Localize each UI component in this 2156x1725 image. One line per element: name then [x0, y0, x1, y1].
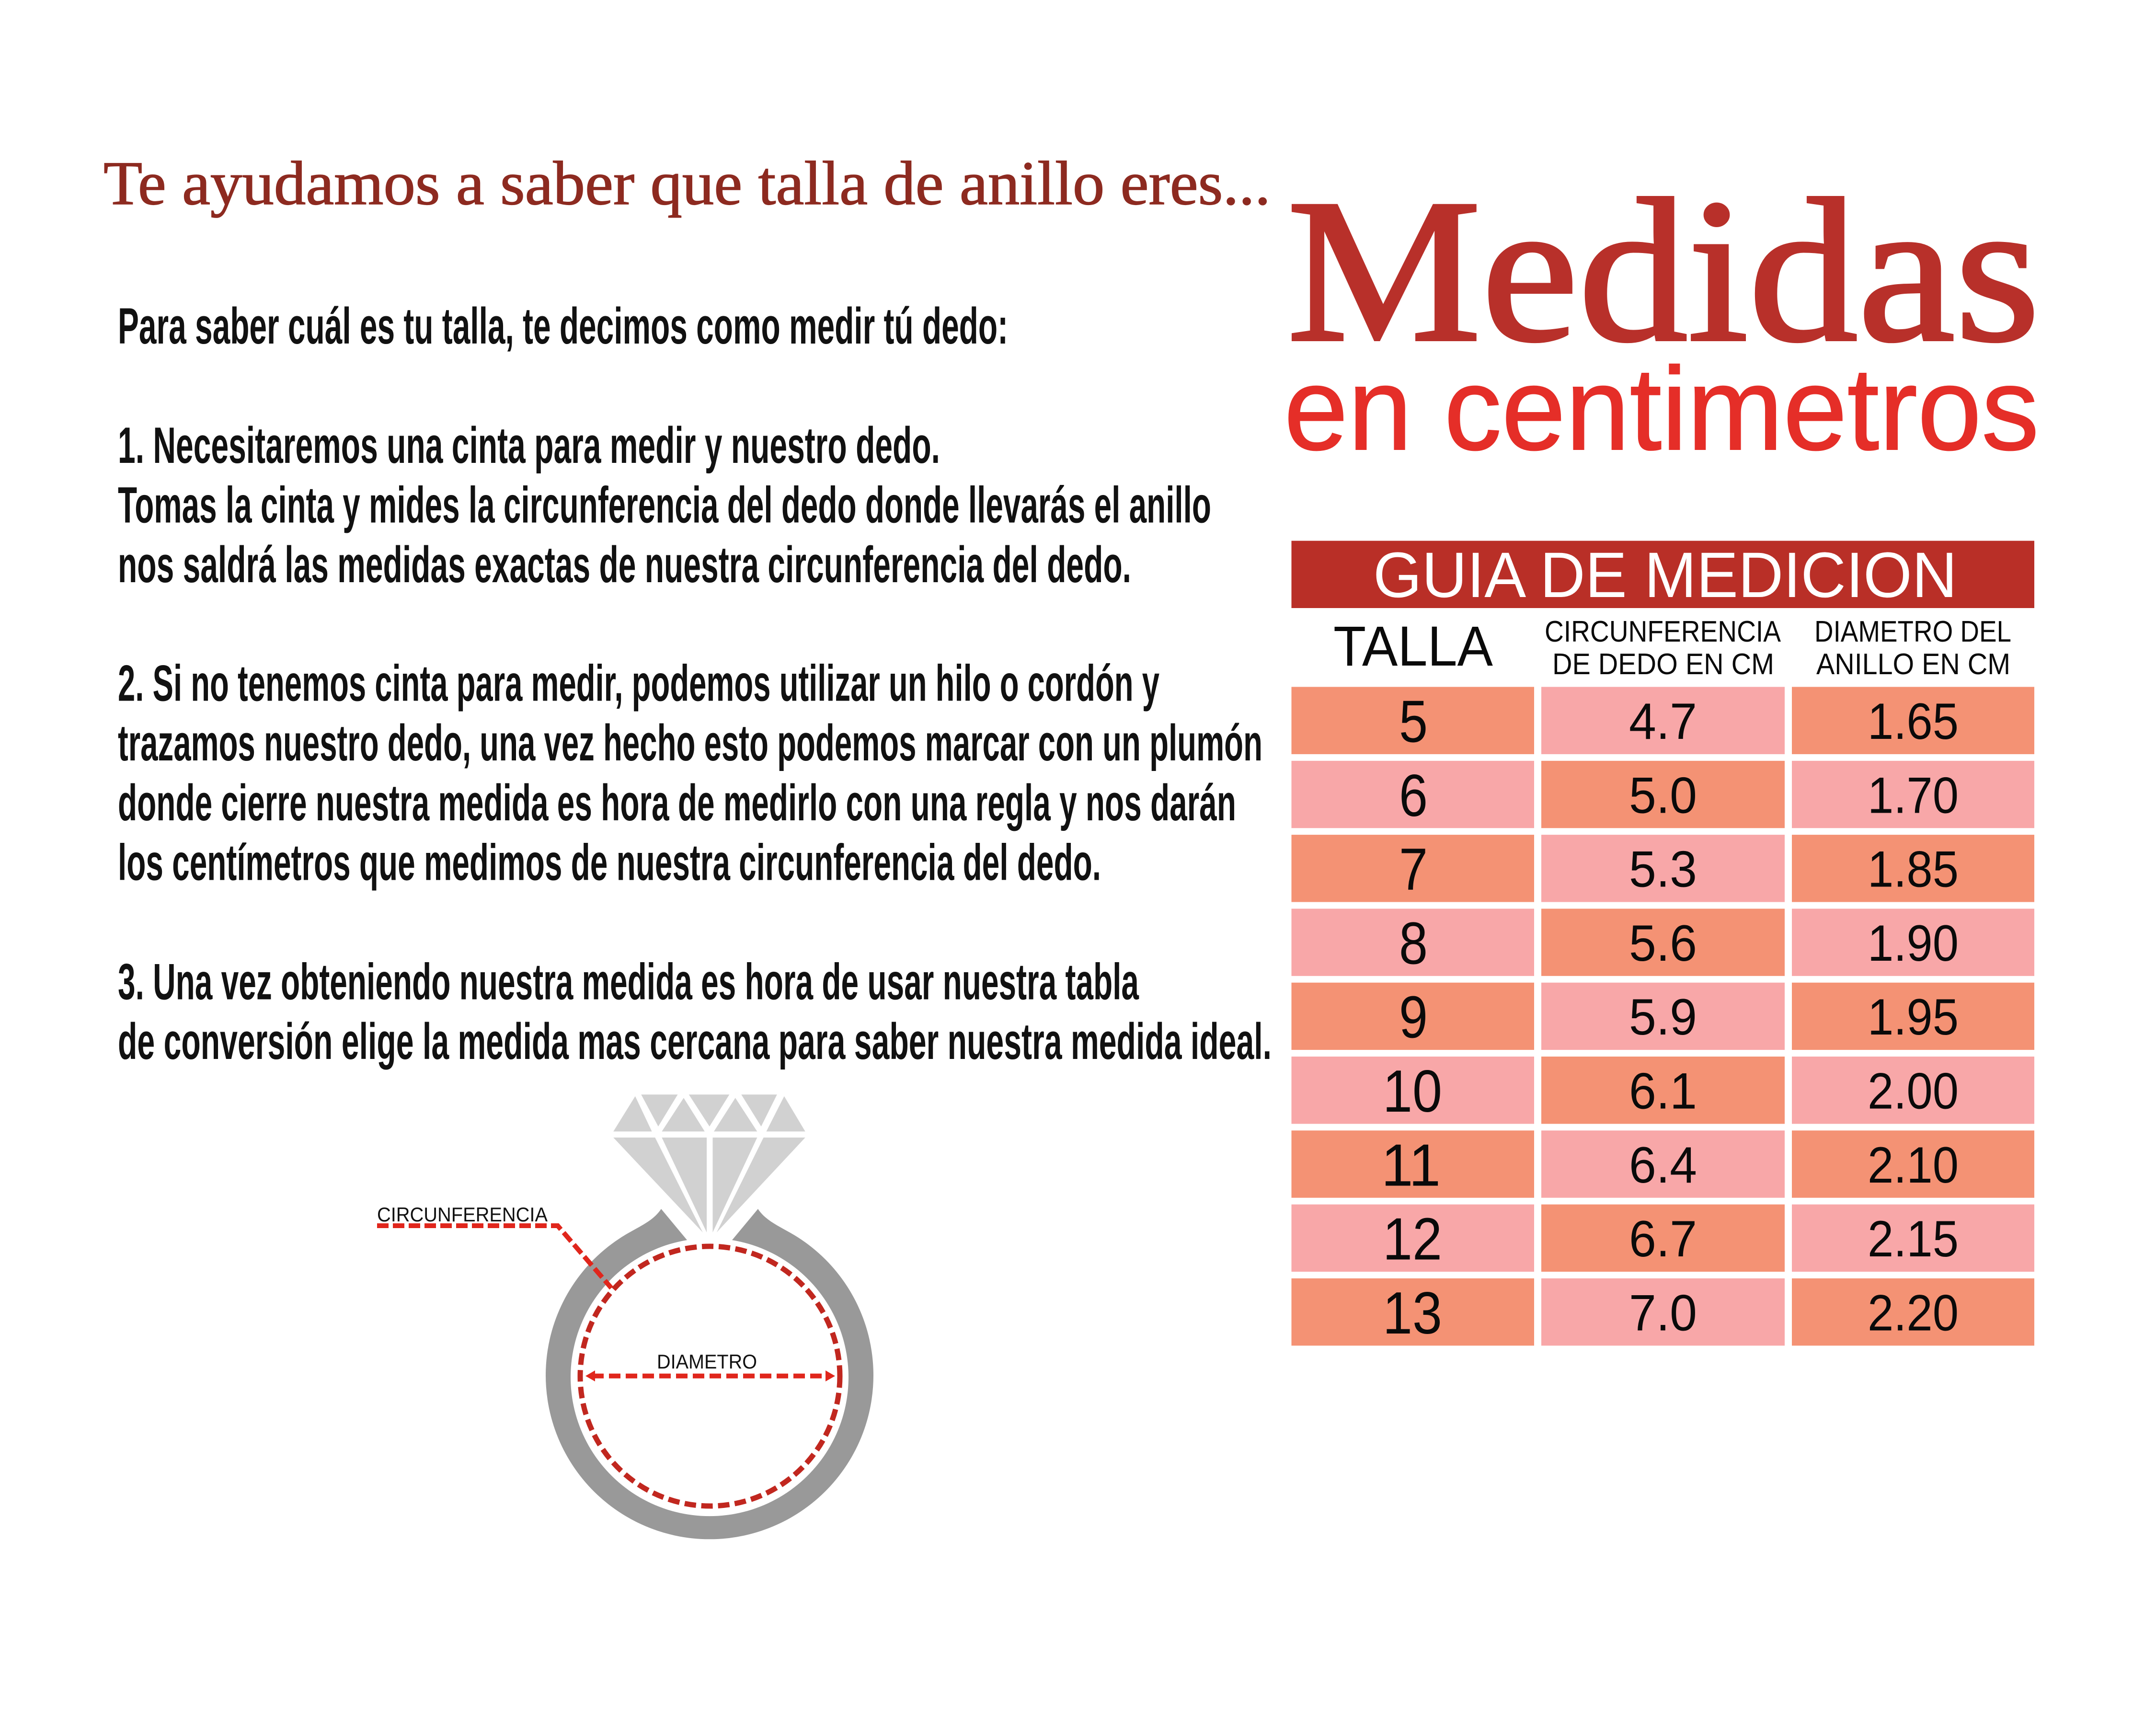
- row: talla 6: 6: [1399, 763, 1428, 829]
- intro line: Para saber cuál es tu talla, te decimos como medir tú dedo:: [118, 297, 1008, 355]
- row: talla 5: 1.65: [1868, 692, 1959, 750]
- row: talla 9: 9: [1399, 985, 1428, 1051]
- row: talla 10: 6.1: [1629, 1062, 1697, 1119]
- row: talla 11: 11: [1381, 1132, 1441, 1198]
- column header: talla: TALLA: [1333, 615, 1493, 678]
- measurement table: [1292, 540, 2034, 1346]
- row: talla 13: 7.0: [1629, 1284, 1697, 1341]
- row: talla 8: 1.90: [1868, 914, 1959, 972]
- arrow: diameter: [585, 1370, 835, 1381]
- row: talla 8: 8: [1399, 910, 1428, 977]
- main title: Medidas: Medidas: [1287, 157, 2040, 384]
- step 2: donde cierre nuestra medida es hora de medirlo con una regla y nos darán: [118, 774, 1236, 831]
- row: talla 10: [1292, 1057, 2034, 1125]
- row: talla 7: 7: [1399, 837, 1428, 903]
- row: talla 12: 2.15: [1868, 1210, 1959, 1267]
- circumference label: CIRCUNFERENCIA: [377, 1203, 548, 1226]
- row: talla 11: 2.10: [1868, 1136, 1959, 1194]
- row: talla 6: [1292, 761, 2034, 829]
- row: talla 12: [1292, 1205, 2034, 1273]
- column header: diametro: DIAMETRO DEL: [1814, 615, 2011, 648]
- row: talla 11: 6.4: [1629, 1136, 1697, 1194]
- row: talla 10: 2.00: [1868, 1062, 1959, 1119]
- circumference leader line: [377, 1226, 611, 1288]
- column header: diametro: ANILLO EN CM: [1816, 648, 2010, 681]
- step 3: 3. Una vez obteniendo nuestra medida es hora de usar nuestra tabla: [118, 953, 1139, 1010]
- row: talla 7: [1292, 835, 2034, 903]
- diameter label: DIAMETRO: [657, 1350, 757, 1373]
- step 2: trazamos nuestro dedo, una vez hecho esto podemos marcar con un plumón: [118, 714, 1262, 771]
- row: talla 9: 1.95: [1868, 988, 1959, 1046]
- row: talla 7: 5.3: [1629, 840, 1697, 898]
- row: talla 9: [1292, 983, 2034, 1051]
- step 3: de conversión elige la medida mas cercana para saber nuestra medida ideal.: [118, 1012, 1272, 1070]
- row: talla 5: 5: [1399, 689, 1428, 755]
- row: talla 13: 2.20: [1868, 1284, 1959, 1341]
- icon: ring band: [546, 1209, 873, 1539]
- step 2: [118, 655, 1262, 891]
- row: talla 13: [1292, 1278, 2034, 1346]
- step 2: los centímetros que medimos de nuestra circunferencia del dedo.: [118, 834, 1101, 891]
- step 1: 1. Necesitaremos una cinta para medir y nuestro dedo.: [118, 416, 940, 474]
- step 3: [118, 953, 1272, 1070]
- tagline heading: Te ayudamos a saber que talla de anillo eres...: [103, 149, 1271, 218]
- row: talla 6: 1.70: [1868, 766, 1959, 824]
- step 1: nos saldrá las medidas exactas de nuestra circunferencia del dedo.: [118, 536, 1131, 593]
- column header: circunferencia: [1545, 615, 1781, 681]
- icon: diamond: [613, 1094, 805, 1232]
- row: talla 9: 5.9: [1629, 988, 1697, 1046]
- row: talla 5: 4.7: [1629, 692, 1697, 750]
- subtitle: en centimetros: en centimetros: [1284, 343, 2039, 475]
- row: talla 11: [1292, 1130, 2034, 1198]
- column header: diametro: [1814, 615, 2011, 681]
- row: talla 5: [1292, 687, 2034, 755]
- instructions text block: [118, 297, 1272, 1070]
- step 1: [118, 416, 1211, 593]
- step 2: 2. Si no tenemos cinta para medir, podemos utilizar un hilo o cordón y: [118, 655, 1159, 712]
- row: talla 13: 13: [1383, 1280, 1442, 1346]
- table title bar: GUIA DE MEDICION: [1373, 540, 1957, 611]
- row: talla 7: 1.85: [1868, 840, 1959, 898]
- step 1: Tomas la cinta y mides la circunferencia del dedo donde llevarás el anillo: [118, 476, 1211, 534]
- row: talla 8: [1292, 908, 2034, 977]
- row: talla 6: 5.0: [1629, 766, 1697, 824]
- column header: circunferencia: DE DEDO EN CM: [1552, 648, 1774, 681]
- column header: circunferencia: CIRCUNFERENCIA: [1545, 615, 1781, 648]
- row: talla 12: 6.7: [1629, 1210, 1697, 1267]
- row: talla 12: 12: [1383, 1207, 1442, 1273]
- row: talla 8: 5.6: [1629, 914, 1697, 972]
- row: talla 10: 10: [1383, 1058, 1442, 1125]
- dashed circumference circle: [580, 1246, 840, 1506]
- ring diagram: [377, 1094, 873, 1539]
